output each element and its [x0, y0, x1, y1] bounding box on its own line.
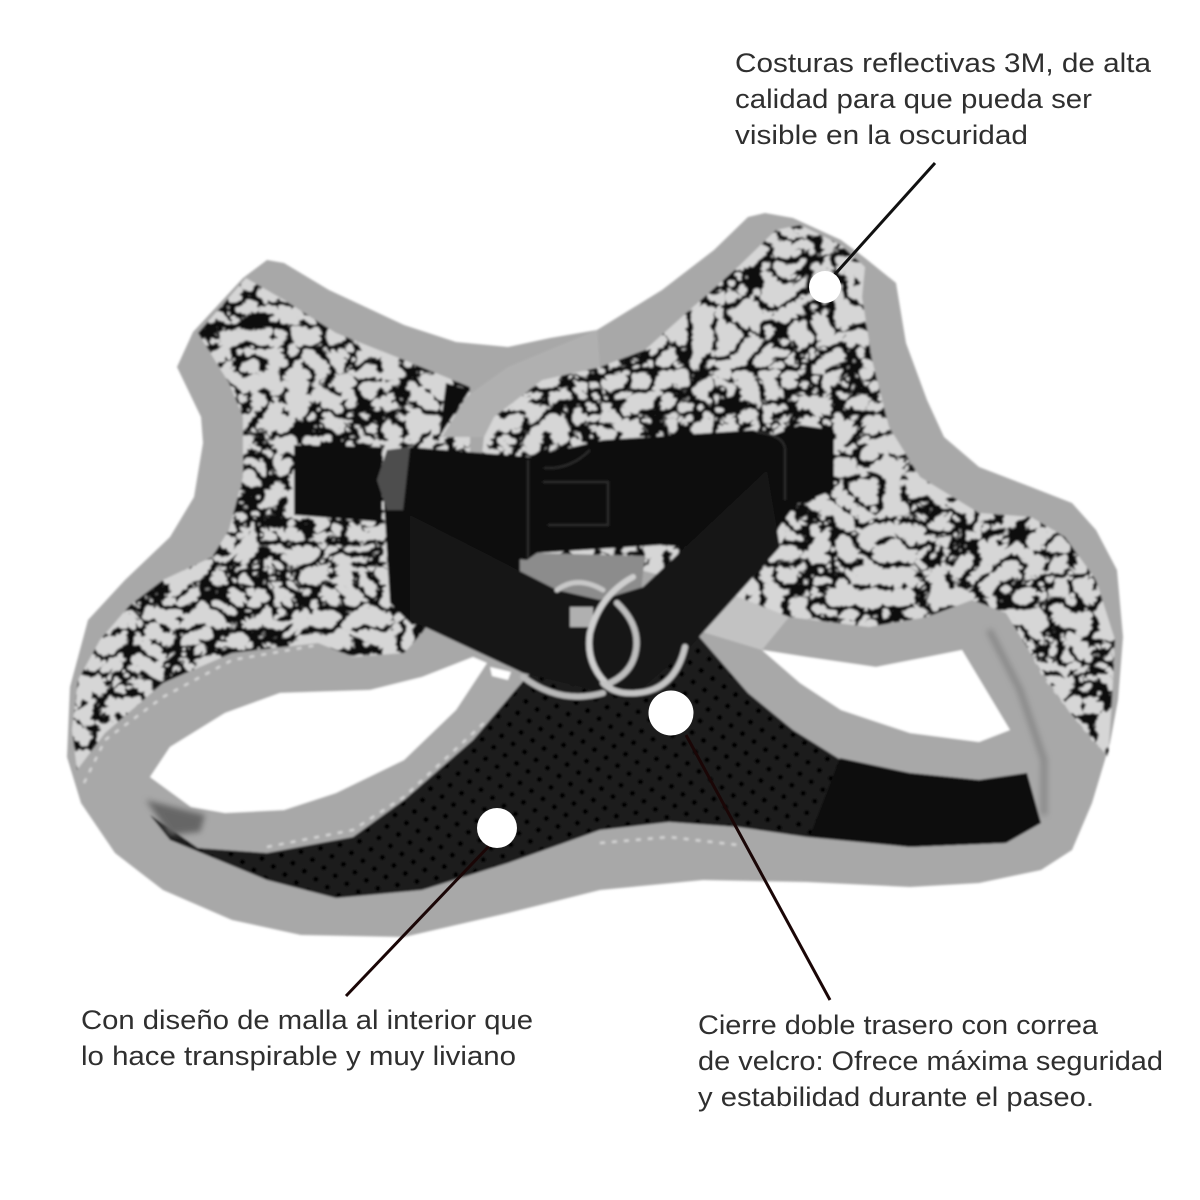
callout: mesh: Con diseño de malla al interior que: [81, 1005, 533, 1035]
outer grey binding: [67, 213, 1123, 937]
darker crease on right corner band: [989, 630, 1044, 815]
right webbing strap: [760, 425, 834, 540]
gap between collar ends: [439, 383, 470, 437]
stitching: [84, 617, 1099, 847]
callout: reflective stitching: visible en la oscuridad: [735, 120, 1028, 150]
leader line: rear closure: [686, 735, 830, 1000]
callout: mesh: [81, 1005, 533, 1071]
fabric behind rings: [500, 552, 645, 612]
dark backing under buckle and strap: [382, 447, 520, 625]
marker dot: rear closure: [648, 690, 694, 736]
patterned marble fabric: [71, 224, 1116, 770]
callout: rear closure: Cierre doble trasero con correa: [698, 1010, 1098, 1040]
left webbing strap: [294, 445, 382, 522]
callout: reflective stitching: [735, 48, 1151, 150]
black mesh lining: [150, 600, 1041, 898]
lighter pad next to right opening: [696, 590, 789, 650]
callout: reflective stitching: Costuras reflectivas 3M, de alta: [735, 48, 1151, 78]
callout: mesh: lo hace transpirable y muy liviano: [81, 1041, 516, 1071]
metal rings: [523, 577, 685, 697]
left leg opening: [150, 657, 487, 813]
right end of mesh, darker: [810, 758, 1041, 847]
buckle: [410, 430, 787, 560]
overlapping collar binding: [442, 330, 600, 437]
leader line: mesh: [346, 845, 490, 996]
harness product illustration: [60, 210, 1140, 937]
callout: rear closure: de velcro: Ofrece máxima seguridad: [698, 1046, 1163, 1076]
callout: reflective stitching: calidad para que pueda ser: [735, 84, 1092, 114]
marker dot: mesh: [477, 808, 517, 848]
marker dot: reflective stitching: [809, 271, 841, 303]
leader line: reflective stitching: [828, 163, 935, 282]
right leg opening: [762, 650, 1010, 742]
slider: [377, 447, 410, 607]
shadow at left corner: [146, 800, 205, 835]
callout: rear closure: y estabilidad durante el paseo.: [698, 1082, 1094, 1112]
diagonal strap: [410, 470, 780, 692]
callout: rear closure: [698, 1010, 1163, 1112]
small gap under strap: [490, 667, 511, 680]
